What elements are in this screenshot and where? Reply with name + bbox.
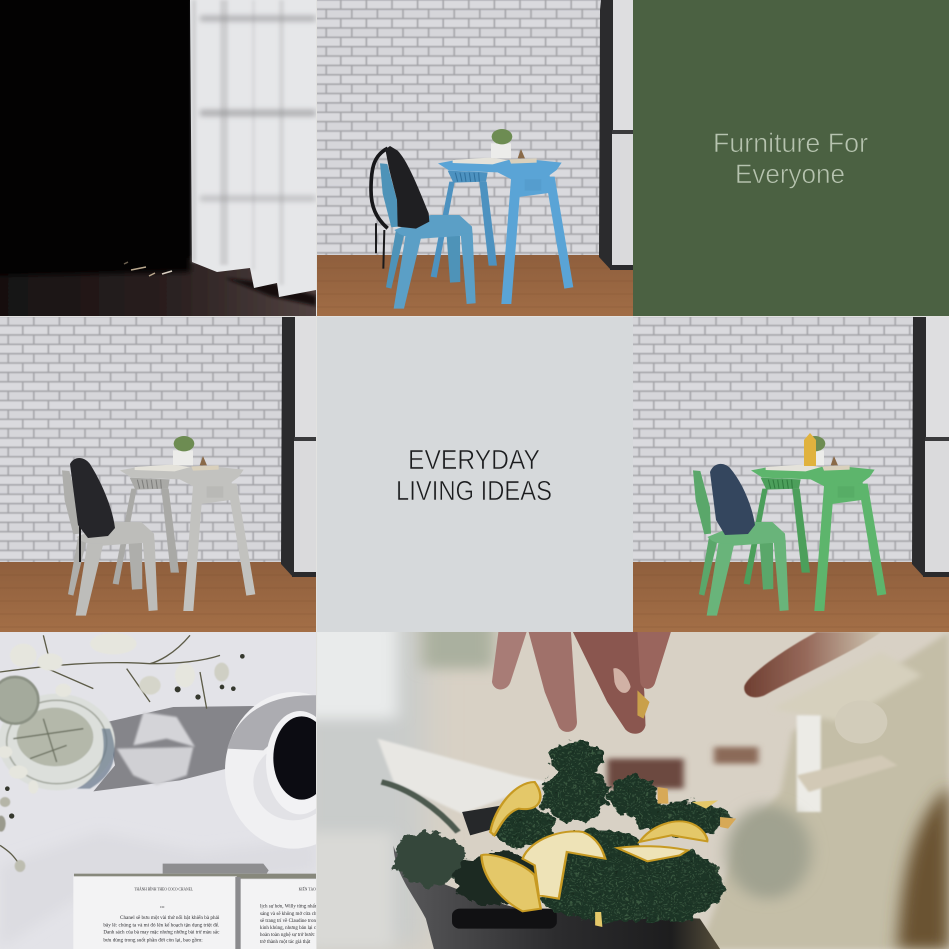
open book: bưu dùng trong suốt phần đời còn lại, bao gồm: (103, 939, 203, 944)
open book: Danh sách của bà may mặc nhưng những bài trừ màu sắc (103, 930, 220, 936)
panel: hands seasoning a pan of greens (317, 632, 949, 949)
heading: everyday living ideas (396, 444, 552, 506)
open book: KIẾN TẠO (299, 887, 316, 892)
open book: hoàn toàn nghệ sự trở bước áo (260, 933, 321, 938)
pan (394, 805, 720, 949)
heading: furniture for everyone: Furniture For (713, 128, 868, 158)
icon: yellow bottle (804, 433, 816, 466)
gypsophila branches (0, 635, 220, 865)
icon: dark backpack (70, 458, 115, 562)
open book: lịch sự hơn, Willy từng nhấn (260, 905, 318, 910)
heading: furniture for everyone (713, 128, 868, 189)
open book (73, 864, 321, 949)
panel: grey table and chair (0, 317, 316, 632)
panel: everyday living ideas heading (317, 317, 633, 632)
panel: furniture for everyone heading (633, 0, 949, 316)
lemon slices (481, 782, 736, 927)
panel: blue table and chair (317, 0, 633, 316)
greens (394, 742, 728, 922)
floor (0, 257, 316, 316)
open book: kinh khủng, nhưng bản lại có (260, 926, 319, 931)
curtain shadow (225, 278, 316, 306)
panel: table with vase, coffee and book (0, 635, 316, 949)
curtain (190, 0, 316, 297)
panel: green table and chair (633, 317, 949, 632)
vase (0, 677, 115, 790)
icon: black backpack (371, 146, 429, 269)
open book: Chanel sẽ bưu một vài thứ nổi bật khiến bà phải (120, 915, 220, 921)
open book: sẽ trang trí về Claudine trong (260, 919, 319, 924)
shadow (93, 706, 260, 791)
saucer (225, 692, 316, 848)
light slits on the floor (124, 262, 172, 276)
heading: everyday living ideas: LIVING IDEAS (396, 475, 552, 506)
coffee cup (266, 711, 316, 814)
blurred greens at right (726, 805, 811, 899)
open book: ••• (160, 905, 165, 910)
panel: dark room with sheer curtain (0, 0, 330, 330)
heading: everyday living ideas: EVERYDAY (408, 444, 540, 475)
heading: furniture for everyone: Everyone (735, 159, 845, 189)
open book: THÀNH BÌNH THEO COCO CHANEL (134, 887, 194, 892)
open book: trở thành một tác giả thật (260, 940, 311, 945)
blurred background (293, 612, 758, 949)
open book: sáng và sẽ không mở cửa cho (260, 912, 319, 917)
stem at left (381, 782, 458, 832)
fingers (492, 632, 881, 734)
icon: navy backpack (710, 464, 755, 535)
open book: bây lẽ: chúng ta và mi đó lên kế hoạch tận dụng triệt để. (103, 922, 219, 928)
blurred foreground hand at right (700, 632, 949, 949)
